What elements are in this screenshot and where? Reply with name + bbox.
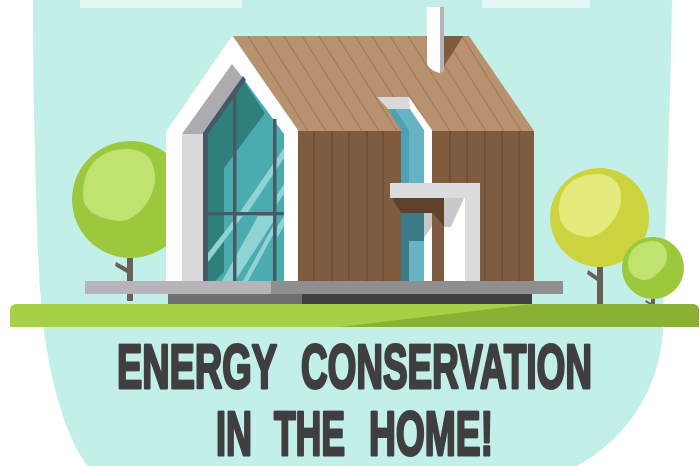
timber wall xyxy=(298,131,534,281)
glazed gable window xyxy=(203,76,284,281)
title line 2 xyxy=(216,400,493,466)
dormer opening xyxy=(377,97,432,183)
white gable frame xyxy=(166,36,298,281)
roof xyxy=(233,36,534,131)
entrance xyxy=(390,183,480,281)
stone terrace slab xyxy=(85,281,563,294)
side wall and grey soffit xyxy=(182,64,243,281)
chimney shadow xyxy=(444,36,463,66)
title line 1 xyxy=(117,333,592,402)
foundation xyxy=(168,294,532,304)
left tree xyxy=(72,141,189,301)
window frame xyxy=(203,76,284,281)
window shadow xyxy=(206,80,265,281)
title line 1: ENERGY xyxy=(117,333,277,402)
top banner stub right xyxy=(482,0,590,8)
green ground strip xyxy=(10,304,699,327)
top banner stub left xyxy=(80,0,242,8)
title xyxy=(117,333,592,466)
chimney xyxy=(427,7,444,73)
glass reflections xyxy=(208,148,284,281)
large right tree xyxy=(550,168,649,304)
house xyxy=(166,7,534,281)
small right tree xyxy=(622,237,684,305)
